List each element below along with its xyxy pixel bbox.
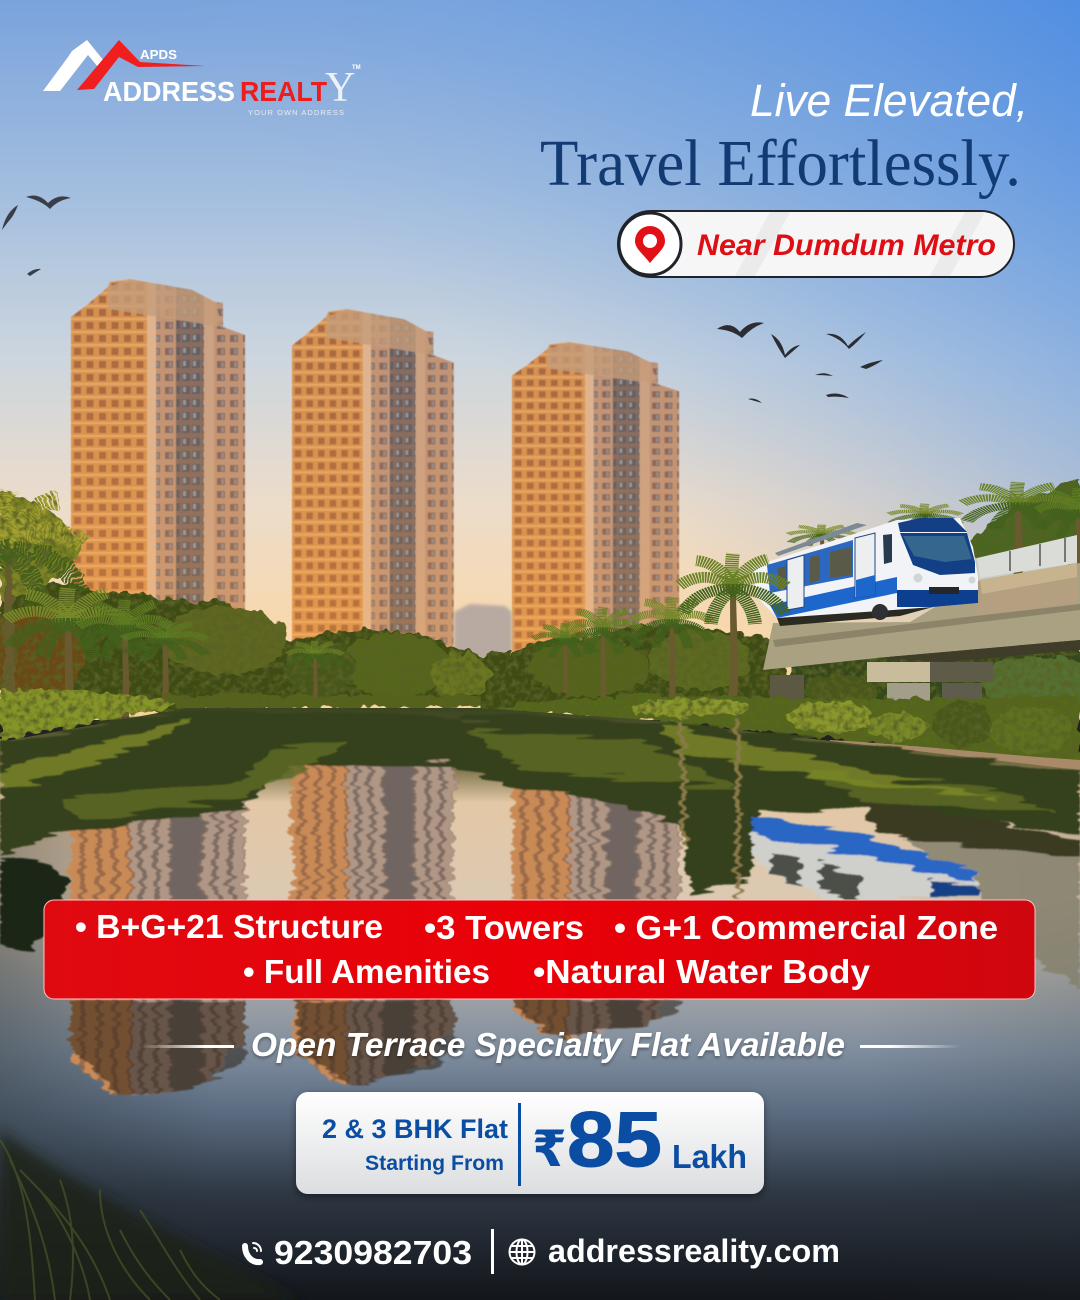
bushes and shoreline bbox=[480, 695, 1080, 768]
dark foliage left reflection bbox=[0, 859, 70, 950]
location pin icon bbox=[619, 213, 681, 275]
greenery under the bridge bbox=[790, 620, 1080, 720]
terrace tagline: Open Terrace Specialty Flat Available bbox=[251, 1026, 845, 1063]
logo APDS: APDS bbox=[140, 47, 177, 62]
tree reflections bbox=[0, 710, 1080, 895]
sky bbox=[0, 0, 1080, 720]
tower 2 bbox=[292, 309, 454, 674]
palm trees left bbox=[7, 587, 343, 730]
feature: structure: • B+G+21 Structure bbox=[75, 908, 383, 945]
feature: amenities: • Full Amenities bbox=[243, 953, 490, 990]
location text: Near Dumdum Metro bbox=[697, 229, 996, 262]
left fade line bbox=[140, 1045, 234, 1048]
feature: water body: •Natural Water Body bbox=[533, 953, 871, 990]
tower 1 bbox=[71, 279, 245, 659]
phone icon bbox=[245, 1243, 261, 1262]
logo wordmark address: ADDRESS bbox=[103, 76, 235, 107]
divider bbox=[518, 1103, 521, 1186]
olive foliage reflection patches bbox=[60, 730, 1060, 820]
logo wordmark realty: REALT bbox=[240, 76, 327, 107]
distant building bbox=[454, 604, 512, 660]
tree line right bbox=[480, 625, 790, 720]
logo tagline: YOUR OWN ADDRESS bbox=[248, 108, 344, 117]
train reflection bbox=[752, 815, 980, 900]
shoreline edge bbox=[830, 740, 1080, 772]
contact divider bbox=[491, 1229, 494, 1274]
price card bbox=[296, 1092, 764, 1194]
features band bbox=[44, 900, 1035, 999]
bridge reflection bbox=[870, 812, 1080, 990]
palm trunks reflection bbox=[682, 720, 738, 900]
starting from: Starting From bbox=[365, 1152, 504, 1175]
left grass bank bbox=[0, 689, 490, 740]
logo bbox=[43, 40, 361, 117]
tower reflections bbox=[71, 737, 679, 1098]
heading line 1: Live Elevated, bbox=[750, 75, 1028, 126]
lake water bbox=[0, 708, 1080, 1300]
price: 85 bbox=[567, 1095, 662, 1183]
palm in front of the bridge bbox=[680, 553, 786, 696]
metro train bbox=[752, 518, 978, 626]
birds top left bbox=[2, 195, 71, 276]
flat type: 2 & 3 BHK Flat bbox=[322, 1114, 508, 1144]
heading line 2: Travel Effortlessly. bbox=[540, 127, 1021, 200]
website: addressreality.com bbox=[548, 1233, 840, 1269]
tree line left bbox=[0, 582, 510, 715]
lakh: Lakh bbox=[672, 1138, 747, 1175]
foreground grass bbox=[0, 1130, 300, 1300]
rupee symbol: ₹ bbox=[532, 1120, 567, 1178]
sun-lit foliage reflection bbox=[0, 718, 1000, 800]
logo serif Y: Y bbox=[325, 65, 355, 111]
background palms behind the train bbox=[788, 480, 1080, 587]
elevated metro bridge bbox=[763, 535, 1080, 712]
logo trademark: TM bbox=[352, 65, 361, 71]
large palm left bbox=[0, 490, 83, 728]
phone number: 9230982703 bbox=[274, 1234, 472, 1271]
rippled reflections bbox=[0, 710, 1080, 1098]
feature: commercial: • G+1 Commercial Zone bbox=[614, 909, 998, 946]
palm trees right bbox=[533, 597, 711, 702]
tower 3 bbox=[512, 342, 679, 676]
feature: towers: •3 Towers bbox=[424, 909, 584, 946]
right fade line bbox=[860, 1045, 960, 1048]
globe icon bbox=[510, 1240, 534, 1264]
logo house icon bbox=[43, 40, 205, 91]
birds top right bbox=[717, 322, 883, 403]
location pill bbox=[618, 211, 1014, 277]
